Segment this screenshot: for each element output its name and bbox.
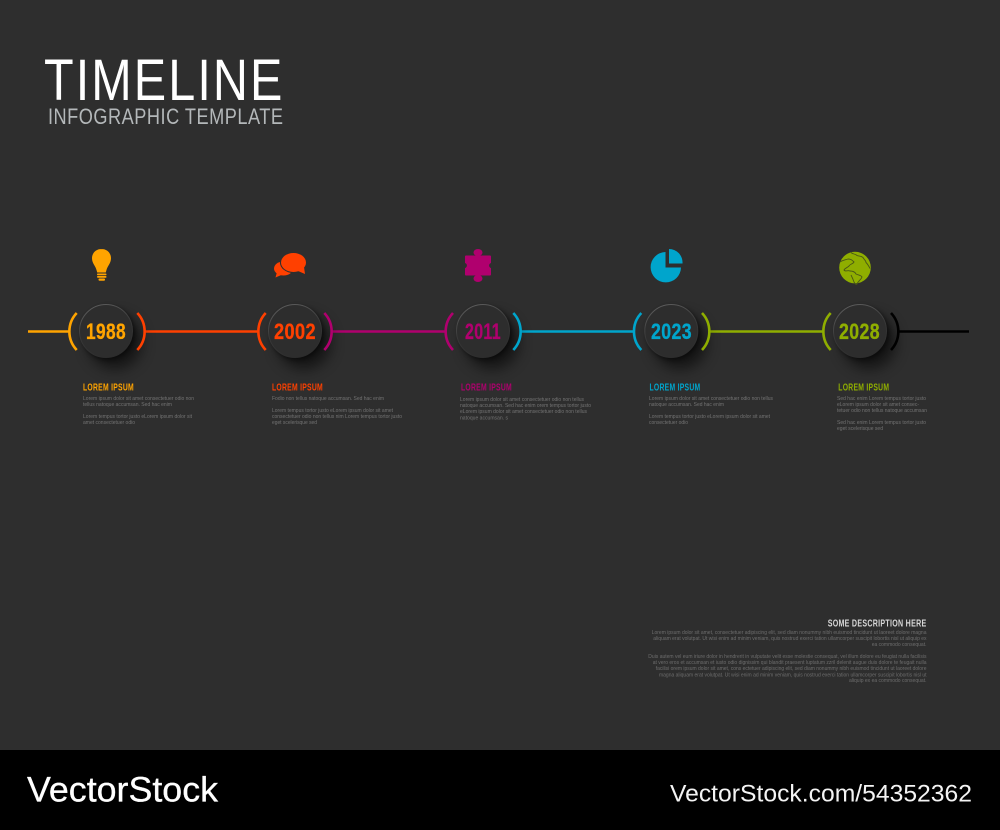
- icon: light bulb: [92, 249, 111, 281]
- year badge 2002: 2002: [274, 319, 316, 344]
- icon: puzzle piece: [462, 249, 494, 282]
- text: 2011 description: LOREM IPSUM: [461, 382, 512, 394]
- text: 2028 description: tetuer odio non tellus natoque accumsan: [837, 408, 927, 414]
- year badge 2002: [258, 304, 332, 369]
- text: 1988 description: tellus natoque accumsan. Sed hac enim: [83, 402, 173, 408]
- year badge 1988: 1988: [86, 319, 126, 344]
- milestone 2002: [258, 252, 402, 426]
- text: 2011 description: eLorem ipsum dolor sit amet consectetuer odio non tellus: [460, 409, 587, 415]
- year badge 2028: 2028: [839, 319, 880, 344]
- text: 1988 description: LOREM IPSUM: [83, 382, 134, 394]
- subtitle: INFOGRAPHIC TEMPLATE: [48, 104, 284, 129]
- year badge 1988: [69, 304, 145, 369]
- text: 1988 description: [83, 382, 194, 426]
- description body: aliquam erat volutpat. Ut wisi enim ad minim veniam, quis nostrud exerci tation ullamcorper suscipit lobortis nisl ut aliquip ex: [653, 636, 927, 642]
- text: 1988 description: amet consectetuer odio: [83, 420, 135, 426]
- milestone 2011: [446, 249, 591, 422]
- year badge 2011: 2011: [465, 319, 501, 344]
- text: 2011 description: [460, 382, 591, 422]
- text: 2028 description: eLorem ipsum dolor sit amet consec-: [837, 402, 919, 408]
- text: 2023 description: Lorem tempus tortor justo eLorem ipsum dolor sit amet: [649, 414, 770, 420]
- text: 2028 description: [837, 382, 927, 432]
- text: 2011 description: natoque accumsan. s: [460, 416, 508, 422]
- text: 2002 description: Fodio non tellus natoque accumsan. Sed hac enim: [272, 396, 385, 402]
- description body: [648, 630, 927, 684]
- year badge 2028: [823, 304, 898, 369]
- footer bar: [0, 750, 1000, 830]
- year badge 2011: [446, 304, 521, 369]
- footer url: VectorStock.com/54352362: [670, 781, 972, 808]
- milestone 2028: [823, 252, 927, 432]
- text: 1988 description: Lorem tempus tortor justo eLorem ipsum dolor sit: [83, 414, 192, 420]
- description heading: SOME DESCRIPTION HERE: [828, 618, 926, 630]
- year badge 2023: 2023: [651, 319, 692, 344]
- text: 2002 description: Lorem tempus tortor justo eLorem ipsum dolor sit amet: [272, 408, 393, 414]
- milestone 2023: [634, 249, 773, 426]
- text: 2011 description: natoque accumsan. Sed hac enim orem tempus tortor justo: [460, 403, 591, 409]
- year badge 2023: [634, 304, 709, 369]
- description body: ea commodo consequat.: [872, 642, 926, 648]
- icon: speech bubbles: [274, 252, 307, 278]
- text: 2002 description: [272, 382, 402, 426]
- description body: magna aliquam erat volutpat. Ut wisi enim ad minim veniam, quis nostrud exerci tation ullamcorper suscipit lobortis nisl ut: [659, 672, 927, 678]
- timeline connector lines: [28, 330, 969, 333]
- milestone 1988: [69, 249, 194, 426]
- text: 2023 description: Lorem ipsum dolor sit amet consectetuer odio non tellus: [649, 396, 773, 402]
- text: 2028 description: eget scelerisque sed: [837, 426, 883, 432]
- text: 2023 description: natoque accumsan. Sed hac enim: [649, 402, 725, 408]
- text: 2002 description: consectetuer odio non tellus nim Lorem tempus tortor justo: [272, 414, 402, 420]
- text: 2002 description: LOREM IPSUM: [272, 382, 323, 394]
- description body: Lorem ipsum dolor sit amet, consectetuer adipiscing elit, sed diam nonummy nibh euismod tincidunt ut laoreet dolore magna: [652, 630, 927, 636]
- icon: globe: [839, 252, 871, 284]
- text: 2002 description: eget scelerisque sed: [272, 420, 317, 426]
- text: 1988 description: Lorem ipsum dolor sit amet consectetuer odio non: [83, 396, 194, 402]
- text: 2028 description: LOREM IPSUM: [838, 382, 889, 394]
- title block: [44, 48, 284, 129]
- text: 2011 description: Lorem ipsum dolor sit amet consectetuer odio non tellus: [460, 397, 584, 403]
- text: 2023 description: consectetuer odio: [649, 420, 688, 426]
- description block: [648, 618, 927, 684]
- footer brand: VectorStock: [27, 771, 219, 810]
- text: 2023 description: LOREM IPSUM: [650, 382, 700, 394]
- title: TIMELINE: [44, 48, 284, 113]
- description body: at vero eros et accumsan et iusto odio dignissim qui blandit praesent luptatum zzril delenit augue duis dolore te feugait nulla: [653, 660, 927, 666]
- description body: Duis autem vel eum iriure dolor in hendrerit in vulputate velit esse molestie consequat, vel illum dolore eu feugiat nulla facilisis: [648, 654, 927, 660]
- text: 2023 description: [649, 382, 773, 426]
- icon: pie chart: [651, 249, 683, 282]
- text: 2028 description: Sed hac enim Lorem tempus tortor justo: [837, 396, 926, 402]
- text: 2028 description: Sed hac enim Lorem tempus tortor justo: [837, 420, 926, 426]
- description body: facilisi orem ipsum dolor sit amet, cons ectetuer adipiscing elit, sed diam nonummy nibh euismod tincidunt ut laoreet dolore: [656, 666, 927, 672]
- description body: aliquip ex ea commodo consequat.: [849, 678, 926, 684]
